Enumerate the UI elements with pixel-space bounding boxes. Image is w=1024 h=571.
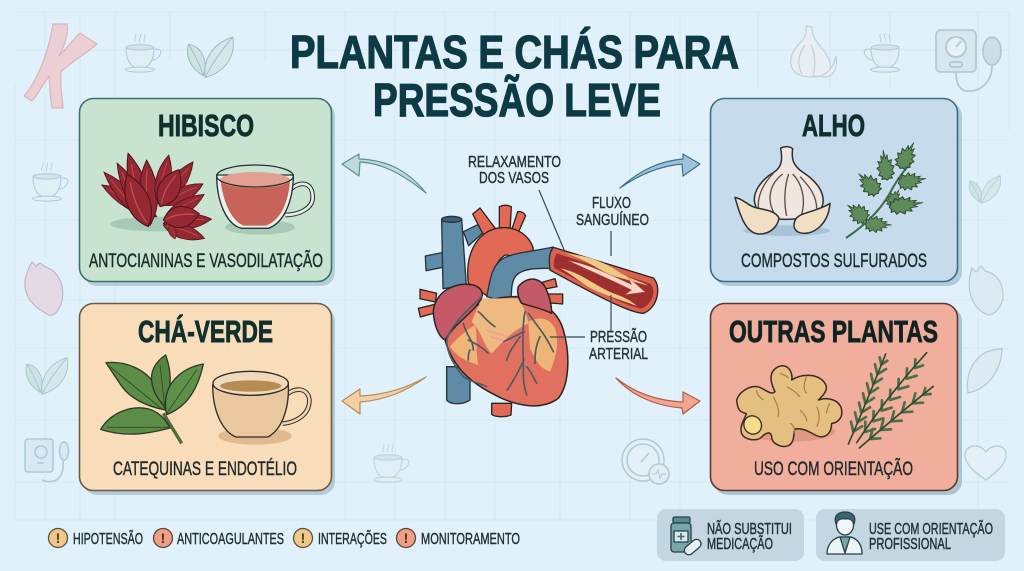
warning: monitoramento	[396, 528, 520, 548]
warning: anticoagulantes	[154, 528, 284, 548]
caption: outras plantas: USO COM ORIENTAÇÃO	[754, 458, 913, 480]
icon: blood pressure monitor left	[25, 439, 68, 482]
caption: chá-verde: CATEQUINAS E ENDOTÉLIO	[113, 459, 297, 480]
icon: pulmonary artery	[487, 247, 553, 303]
icon: green tea cup	[213, 371, 309, 445]
icon: garlic	[735, 147, 830, 236]
heading: chá-verde: CHÁ-VERDE	[138, 314, 273, 349]
icon: garlic top right	[791, 26, 837, 77]
icon: medicine bottle	[671, 517, 703, 557]
icon: heart right bottom	[965, 446, 1006, 480]
icon: coronary vessels	[447, 297, 553, 395]
icon: hibiscus calyces	[98, 151, 212, 245]
arrow: to hibisco	[342, 154, 426, 193]
icon: aortic arch	[418, 205, 563, 417]
panel: outras plantas	[710, 304, 962, 495]
warnings row	[48, 528, 520, 548]
icon: blood pressure monitor top right	[936, 30, 1001, 91]
icon: gauge	[622, 439, 669, 484]
warning: hipotensão: HIPOTENSÃO	[73, 531, 143, 548]
icon: ginger root	[737, 366, 842, 446]
icon: green tea leaves	[101, 355, 203, 443]
icon: artery	[24, 24, 97, 108]
callout lines	[539, 190, 611, 337]
text: NÃO SUBSTITUI	[707, 521, 792, 538]
badge: use com orientação profissional: PROFISSIONAL	[869, 536, 951, 553]
icon: leaf left	[26, 358, 68, 394]
panel: chá-verde	[80, 304, 335, 495]
icon: anatomical heart left	[25, 262, 63, 315]
icon: anatomical heart right	[969, 266, 1003, 315]
icon: rosemary	[848, 353, 933, 448]
label: pressão arterial: PRESSÃO	[590, 326, 647, 346]
heart illustration	[418, 205, 658, 417]
heading: alho: ALHO	[802, 108, 865, 143]
warning: interações	[294, 528, 387, 548]
warning: interações: INTERAÇÕES	[318, 531, 387, 548]
label: relaxamento dos vasos: RELAXAMENTO	[468, 154, 561, 171]
badge: não substitui medicação	[657, 509, 804, 561]
title	[290, 26, 739, 126]
arrow: to alho	[620, 154, 700, 188]
arrow: to outras plantas	[616, 378, 700, 414]
icon: leaf right	[968, 349, 1002, 393]
icon: superior and inferior vena cava	[425, 216, 485, 404]
title: PRESSÃO LEVE	[373, 74, 661, 126]
icon: cup bottom center	[373, 444, 409, 482]
icon: leaves right	[969, 176, 1001, 203]
panel: hibisco	[80, 98, 335, 286]
icon: ventricles	[445, 297, 568, 406]
badge: use com orientação profissional	[816, 509, 1005, 561]
icon: hibiscus tea cup	[217, 165, 313, 235]
icon: leaves top left	[187, 37, 233, 78]
warning: hipotensão: !	[56, 530, 60, 546]
caption: alho: COMPOSTOS SULFURADOS	[741, 251, 927, 272]
icon: parsley	[842, 139, 927, 238]
label: relaxamento dos vasos	[468, 154, 561, 187]
label: fluxo sanguíneo	[576, 195, 649, 229]
heading: outras plantas: OUTRAS PLANTAS	[729, 314, 938, 349]
badge: não substitui medicação: MEDICAÇÃO	[707, 536, 773, 553]
decorative background icons	[24, 24, 1006, 484]
label: fluxo sanguíneo: SANGUÍNEO	[576, 210, 649, 229]
icon: cup top left	[125, 34, 161, 72]
panel: alho	[710, 98, 962, 286]
label: fluxo sanguíneo: FLUXO	[592, 195, 631, 212]
icon: atria	[433, 279, 552, 340]
title: PLANTAS E CHÁS PARA	[290, 26, 739, 78]
warning: anticoagulantes: !	[161, 530, 165, 546]
warning: monitoramento: MONITORAMENTO	[421, 531, 520, 548]
warning: interações: !	[301, 530, 305, 546]
icon: cup top right	[864, 34, 900, 72]
label: pressão arterial	[589, 326, 648, 363]
warning: hipotensão	[48, 528, 143, 548]
arrow: to chá-verde	[342, 377, 426, 414]
warning: anticoagulantes: ANTICOAGULANTES	[177, 531, 284, 548]
caption: hibisco: ANTOCIANINAS E VASODILATAÇÃO	[89, 250, 323, 272]
icon: blood vessel cross-section	[549, 247, 658, 313]
icon: doctor	[827, 512, 862, 554]
heading: hibisco: HIBISCO	[158, 108, 254, 143]
warning: monitoramento: !	[404, 530, 408, 546]
icon: cup left	[32, 163, 68, 201]
label: pressão arterial: ARTERIAL	[589, 346, 648, 363]
label: relaxamento dos vasos: DOS VASOS	[479, 170, 549, 187]
